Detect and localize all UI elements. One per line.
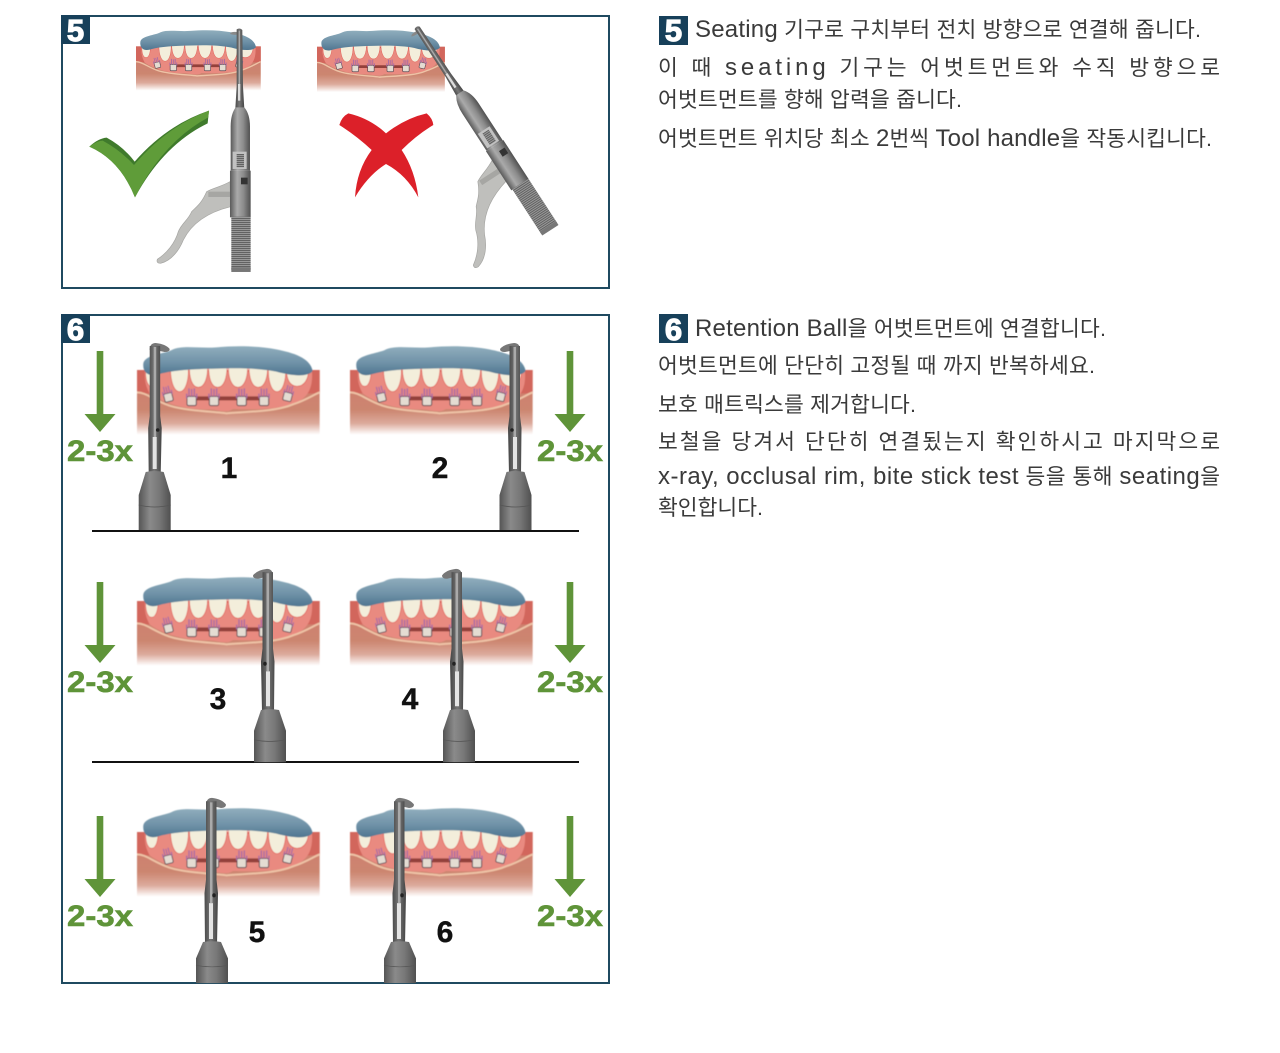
illustration: upper jaw, incorrect tool position: [317, 30, 445, 93]
arrow and repeat label: position 2: [537, 351, 603, 468]
text block: step 5 instructions: [658, 13, 1220, 152]
badge: step 5: 5: [67, 13, 84, 48]
position 2: jaw and tool: 2: [432, 452, 448, 485]
text block: step 6 instructions: 보철을 당겨서 단단히 연결됬는지 확인하시고 마지막으로: [658, 430, 1220, 454]
badge: step 5: [61, 13, 90, 48]
badge: step 6 heading: 6: [665, 312, 682, 347]
text block: step 6 instructions: [658, 312, 1220, 520]
panel: step 6 illustration: [61, 312, 609, 983]
badge: step 6: 6: [67, 312, 84, 347]
arrow and repeat label: position 6: 2-3x: [537, 900, 603, 933]
position 1: jaw and tool: 1: [221, 452, 237, 485]
position 2: jaw and tool: [350, 343, 533, 530]
illustration: seating tool held at an angle: [347, 21, 558, 276]
position 4: jaw and tool: [350, 569, 533, 762]
panel: step 5 illustration: [61, 13, 609, 288]
arrow and repeat label: position 5: [67, 816, 133, 933]
icon: green check mark: [89, 111, 209, 197]
divider line row 2: [92, 761, 579, 763]
position 4: jaw and tool: 4: [402, 683, 419, 716]
arrow and repeat label: position 1: [67, 351, 133, 468]
position 6: jaw and tool: [350, 798, 533, 983]
arrow and repeat label: position 5: 2-3x: [67, 900, 133, 933]
text block: step 6 instructions: 확인합니다.: [658, 496, 763, 520]
badge: step 5 heading: 5: [665, 13, 682, 48]
text block: step 6 instructions: 보호 매트릭스를 제거합니다.: [658, 393, 916, 417]
arrow and repeat label: position 4: [537, 582, 603, 699]
badge: step 6 heading: [659, 312, 688, 347]
position 5: jaw and tool: [137, 798, 320, 983]
arrow and repeat label: position 4: 2-3x: [537, 666, 603, 699]
text block: step 5 instructions: 어벗트먼트를 향해 압력을 줍니다.: [658, 88, 962, 112]
position 3: jaw and tool: 3: [210, 683, 226, 716]
illustration: upper jaw, correct tool position: [136, 30, 261, 92]
arrow and repeat label: position 2: 2-3x: [537, 435, 603, 468]
arrow and repeat label: position 3: [67, 582, 133, 699]
icon: red cross mark: [339, 113, 433, 197]
position 3: jaw and tool: [137, 569, 320, 762]
arrow and repeat label: position 1: 2-3x: [67, 435, 133, 468]
text block: step 5 instructions: 이 때 seating 기구는 어벗트먼트와 수직 방향으로: [658, 54, 1220, 81]
arrow and repeat label: position 3: 2-3x: [67, 666, 133, 699]
text block: step 6 instructions: x-ray, occlusal rim, bite stick test 등을 통해 seating을: [658, 463, 1220, 490]
illustration: seating tool held vertically: [157, 28, 251, 272]
position 6: jaw and tool: 6: [437, 916, 453, 949]
position 5: jaw and tool: 5: [249, 916, 265, 949]
position 1: jaw and tool: [137, 343, 320, 530]
text block: step 6 instructions: Retention Ball을 어벗트먼트에 연결합니다.: [695, 315, 1106, 342]
text block: step 5 instructions: Seating 기구로 구치부터 전치 방향으로 연결해 줍니다.: [695, 16, 1201, 43]
text block: step 5 instructions: 어벗트먼트 위치당 최소 2번씩 Tool handle을 작동시킵니다.: [658, 125, 1212, 152]
badge: step 5 heading: [659, 13, 688, 48]
badge: step 6: [61, 312, 90, 347]
divider line row 1: [92, 530, 579, 532]
arrow and repeat label: position 6: [537, 816, 603, 933]
text block: step 6 instructions: 어벗트먼트에 단단히 고정될 때 까지 반복하세요.: [658, 354, 1095, 378]
